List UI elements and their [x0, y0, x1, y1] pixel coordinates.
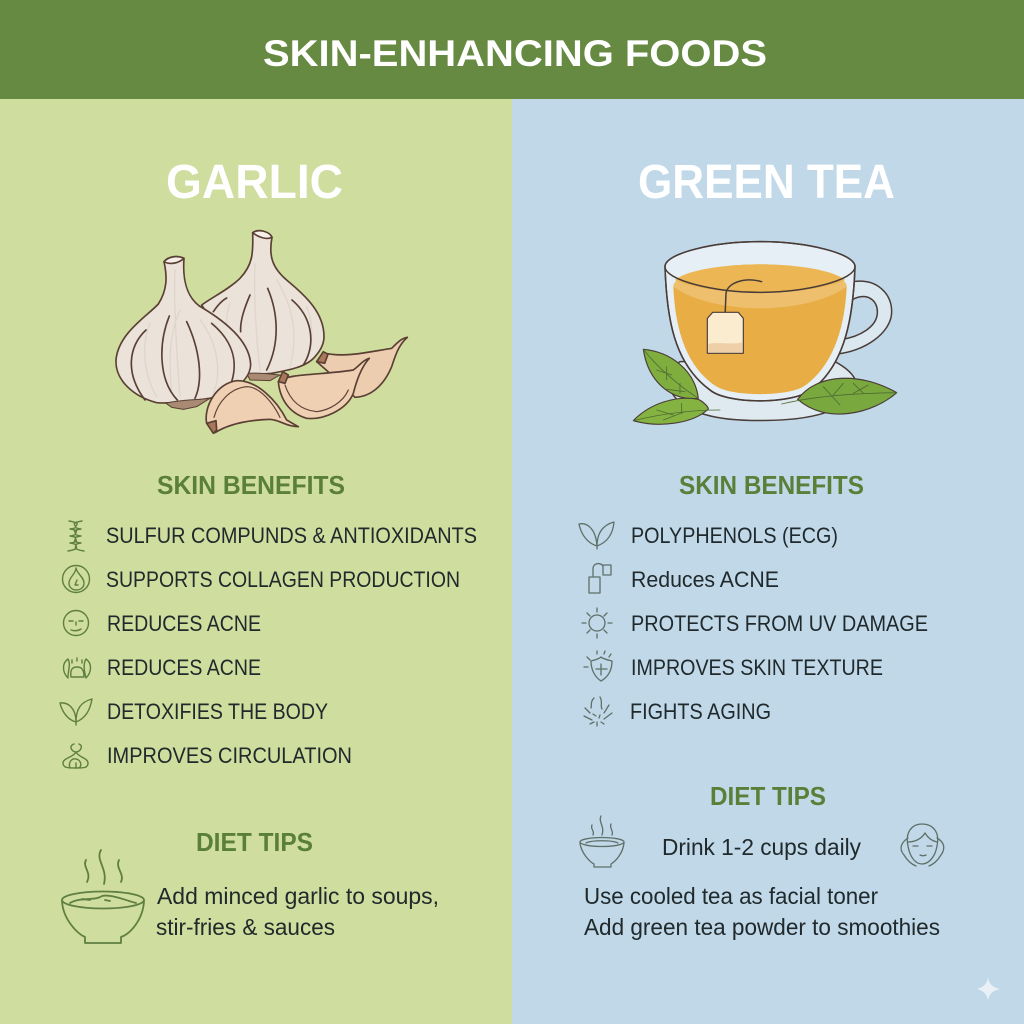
subheading: diet tips: DIET TIPS: [710, 781, 826, 811]
diet tip text: Use cooled tea as facial toner: [584, 883, 878, 909]
icon: tea bags: [589, 564, 611, 593]
panel: garlic: [0, 99, 512, 1024]
benefit text 6: IMPROVES CIRCULATION: [107, 743, 352, 768]
benefit text 3: PROTECTS FROM UV DAMAGE: [631, 611, 928, 636]
bulb: back: [202, 231, 324, 375]
panel: green tea: [512, 99, 1024, 1024]
benefit text 1: POLYPHENOLS (ECG): [631, 523, 838, 548]
benefit text 2: Reduces ACNE: [631, 567, 779, 592]
tea bag: [725, 280, 762, 317]
subheading: skin benefits: SKIN BENEFITS: [157, 470, 345, 500]
leaf: right: [798, 378, 897, 414]
benefits list: [579, 522, 928, 726]
tea liquid: [673, 264, 847, 394]
header banner: [0, 0, 1024, 99]
cup handle: [837, 281, 892, 354]
benefit text 4: REDUCES ACNE: [107, 655, 261, 680]
benefit text 5: FIGHTS AGING: [630, 699, 771, 724]
leaf: bottom left: [633, 398, 708, 424]
diet tip text: Add green tea powder to smoothies: [584, 914, 940, 940]
diet tip text: [584, 883, 940, 940]
diet tip text: stir-fries & sauces: [156, 914, 335, 940]
saucer: [668, 361, 856, 421]
cup rim: [665, 242, 855, 401]
leaf: top left: [643, 349, 698, 399]
icon: sun: [582, 608, 612, 638]
clove: front: [206, 381, 298, 433]
heading: green tea: GREEN TEA: [638, 156, 895, 209]
subheading: skin benefits: SKIN BENEFITS: [679, 470, 864, 500]
icon: garlic circulation: [63, 744, 88, 768]
clove: back right: [317, 337, 407, 397]
icon: clean skin: [64, 658, 90, 678]
cup body: [665, 242, 855, 401]
benefit text 2: SUPPORTS COLLAGEN PRODUCTION: [106, 567, 460, 592]
icon: leaves: [579, 522, 614, 549]
benefit text 5: DETOXIFIES THE BODY: [107, 699, 328, 724]
benefit text 4: IMPROVES SKIN TEXTURE: [631, 655, 883, 680]
icon: shield with plus: [584, 651, 612, 681]
icon: sparkles: [584, 697, 612, 726]
subheading: diet tips: DIET TIPS: [196, 827, 313, 857]
benefit text 1: SULFUR COMPUNDS & ANTIOXIDANTS: [106, 523, 477, 548]
illustration: garlic bulbs and cloves: [116, 231, 407, 433]
icon: garlic in circle: [62, 566, 90, 592]
benefit text 3: REDUCES ACNE: [107, 611, 261, 636]
bulb: front: [116, 257, 251, 403]
icon: leaves: [60, 699, 92, 725]
illustration: tea cup with leaves: [633, 242, 897, 424]
heading: garlic: GARLIC: [166, 156, 343, 209]
icon: face with hands: [901, 824, 944, 866]
clove: middle: [278, 358, 369, 419]
diet tip: cups daily: Drink 1-2 cups daily: [662, 834, 861, 860]
diet tip text: [156, 883, 439, 940]
icon: soup bowl: [62, 850, 144, 943]
title: SKIN-ENHANCING FOODS: [263, 33, 767, 74]
icon: tea bowl: [580, 816, 624, 867]
tea surface band: [673, 264, 847, 308]
diet tip text: Add minced garlic to soups,: [157, 883, 439, 909]
benefits list: [60, 521, 477, 768]
icon: sparkle: [977, 977, 1000, 1001]
icon: face: [64, 610, 88, 636]
icon: sulfur coil: [68, 521, 84, 551]
